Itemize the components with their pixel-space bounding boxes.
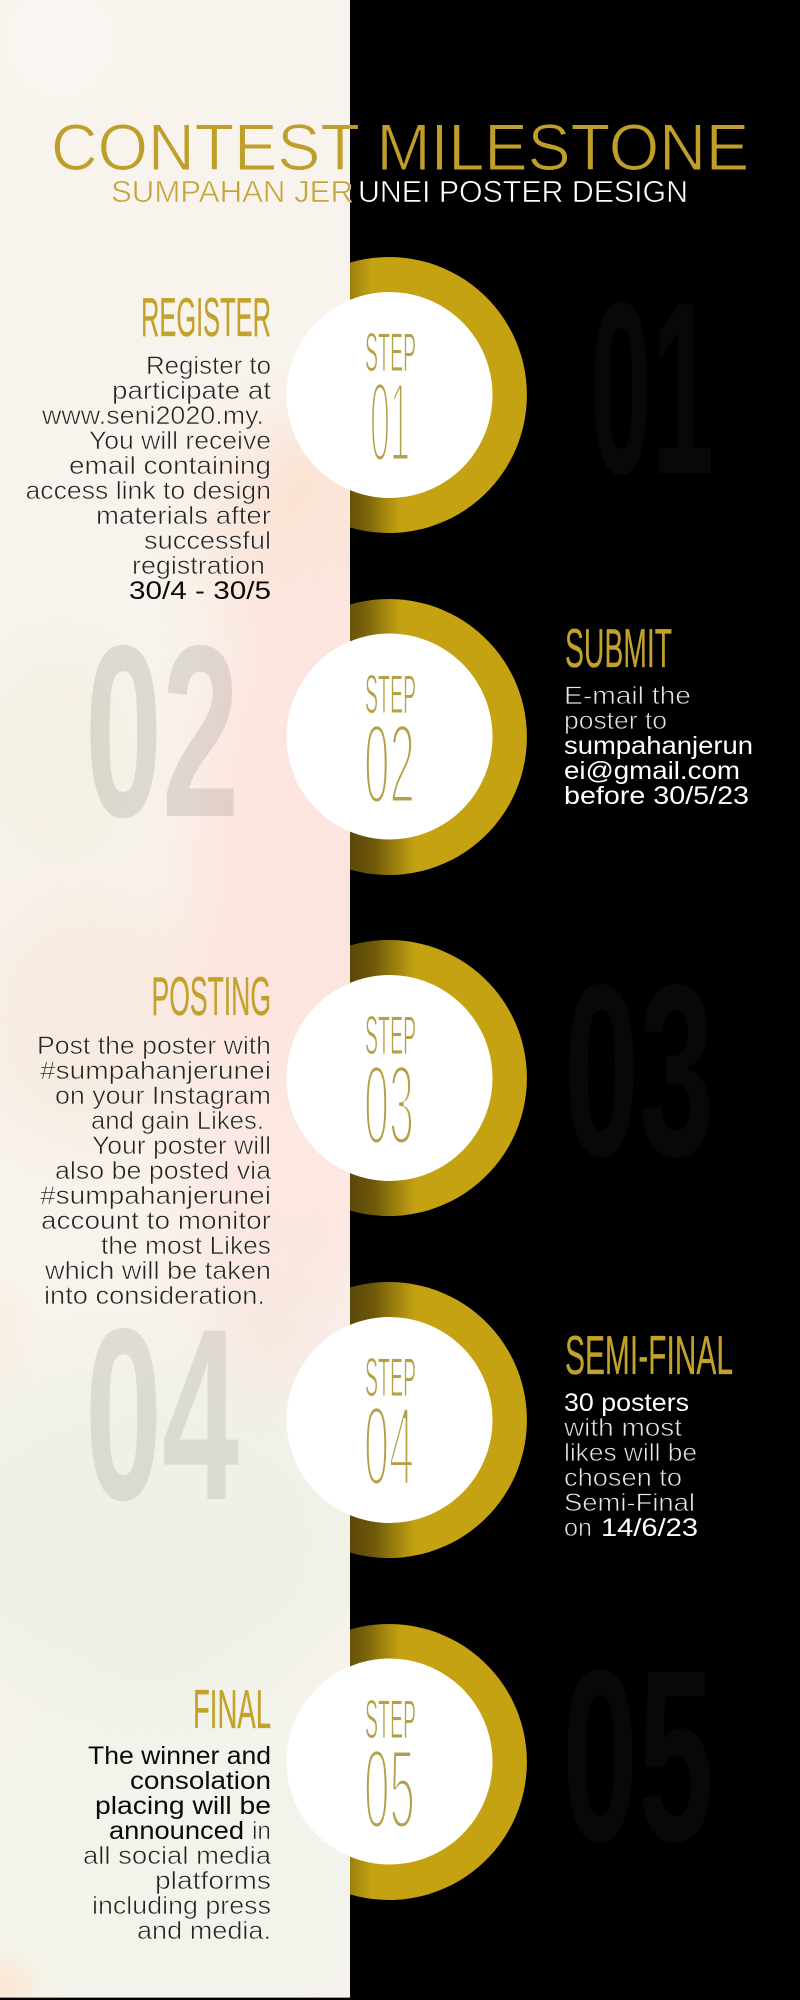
text: semi-final: likes will be — [564, 1439, 697, 1467]
text: final: consolation — [130, 1767, 271, 1795]
text: posting: Your poster will — [92, 1132, 271, 1160]
step 3 circle — [286, 940, 527, 1216]
text: submit: poster to — [564, 707, 667, 735]
text: final: The winner and — [88, 1742, 271, 1770]
text: semi-final: Semi-Final — [564, 1489, 695, 1517]
text: semi-final: 14/6/23 — [601, 1514, 698, 1542]
step 4 circle — [286, 1282, 527, 1558]
text: POSTING — [152, 965, 271, 1027]
text: posting: account to monitor — [41, 1207, 271, 1235]
faint number 04: 04 — [85, 1277, 239, 1551]
text: final — [83, 1742, 271, 1945]
subtitle: UNEI POSTER DESIGN — [358, 174, 688, 209]
step 5 circle: STEP — [365, 1688, 416, 1750]
text: register: Register to — [146, 352, 271, 380]
step 2 circle — [286, 599, 527, 875]
heading: submit: SUBMIT — [565, 617, 672, 679]
text: posting: #sumpahanjerunei — [40, 1182, 271, 1210]
text: register: email containing — [69, 452, 271, 480]
step 3 circle: 03 — [364, 1042, 414, 1168]
step 5 circle — [286, 1624, 527, 1900]
text: posting — [37, 1032, 271, 1310]
text: REGISTER — [141, 286, 271, 348]
text: register: materials after — [96, 502, 271, 530]
text: semi-final: chosen to — [564, 1464, 682, 1492]
heading: final: FINAL — [193, 1678, 271, 1740]
faint number 02: 02 — [85, 594, 239, 868]
step 2 circle: 02 — [364, 701, 415, 827]
text: final: and media. — [137, 1917, 271, 1945]
text: posting: Post the poster with — [37, 1032, 271, 1060]
text: register: 30/4 - 30/5 — [129, 577, 271, 605]
step 2 circle: STEP — [365, 663, 416, 725]
subtitle — [111, 174, 688, 209]
text: register — [26, 352, 271, 605]
subtitle: SUMPAHAN JER — [111, 174, 353, 209]
text: submit — [564, 682, 753, 810]
text: submit: ei@gmail.com — [564, 757, 740, 785]
text: submit: sumpahanjerun — [564, 732, 753, 760]
text: posting: the most Likes — [101, 1232, 271, 1260]
step 4 circle: 04 — [364, 1383, 414, 1509]
text: final: including press — [92, 1892, 271, 1920]
text: final: in — [252, 1817, 271, 1845]
text: register: access link to design — [26, 477, 271, 505]
text: posting: #sumpahanjerunei — [40, 1057, 271, 1085]
step 5 circle: 05 — [364, 1726, 415, 1852]
text: posting: which will be taken — [44, 1257, 271, 1285]
text: register: registration — [132, 552, 265, 580]
text: posting: on your Instagram — [55, 1082, 271, 1110]
text: register: You will receive — [89, 427, 271, 455]
panel: watercolour left background — [0, 0, 430, 2000]
text: register: participate at — [112, 377, 271, 405]
step 1 circle: STEP — [365, 321, 416, 383]
text: semi-final: 30 posters — [564, 1389, 689, 1417]
text: register: successful — [144, 527, 271, 555]
step 3 circle: STEP — [365, 1004, 416, 1066]
text: final: platforms — [155, 1867, 271, 1895]
text: semi-final: on — [564, 1514, 592, 1542]
title: CONTEST MILESTONE — [51, 110, 749, 184]
text: submit: before 30/5/23 — [564, 782, 749, 810]
text: posting: into consideration. — [44, 1282, 265, 1310]
text: submit: E-mail the — [564, 682, 691, 710]
step 1 circle: 01 — [370, 359, 410, 485]
text: posting: and gain Likes. — [91, 1107, 264, 1135]
text: posting: also be posted via — [55, 1157, 271, 1185]
text: final: placing will be — [95, 1792, 271, 1820]
text: register: www.seni2020.my. — [41, 402, 264, 430]
text: final: all social media — [83, 1842, 271, 1870]
text: semi-final: with most — [563, 1414, 682, 1442]
step 4 circle: STEP — [365, 1346, 416, 1408]
text: semi-final — [563, 1389, 698, 1542]
step 1 circle — [286, 257, 527, 533]
text: final: announced — [109, 1817, 244, 1845]
